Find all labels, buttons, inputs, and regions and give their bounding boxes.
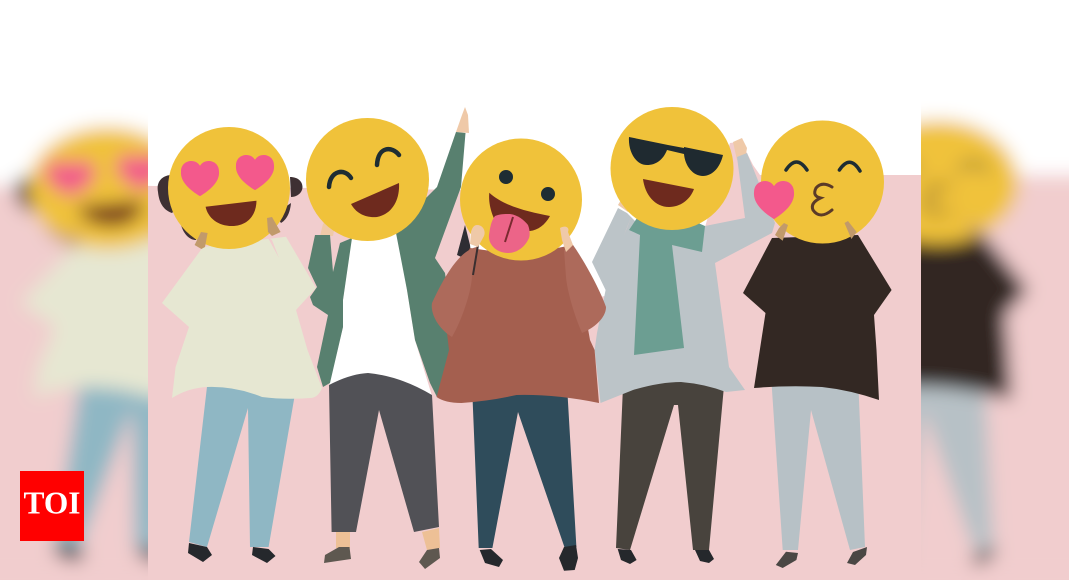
shoes: [776, 547, 867, 568]
kissing face: [761, 120, 884, 244]
teal scarf: [629, 215, 705, 355]
dark shirt: [743, 235, 892, 400]
person 1: heart eyes: [158, 127, 322, 563]
TOI logo: TOI: [24, 484, 80, 520]
white backdrop: [0, 109, 1069, 196]
ankles: [336, 528, 440, 550]
tongue: [489, 214, 530, 253]
raised hand: [456, 107, 469, 133]
light blue trousers: [189, 378, 296, 547]
hair: [158, 175, 302, 240]
grey jacket: [592, 153, 775, 403]
jacket gap: [625, 222, 630, 232]
shoes: [480, 545, 578, 571]
person 5: kissing: [743, 120, 892, 568]
pink background: [0, 142, 1069, 580]
waving hand: [320, 223, 334, 236]
laughing eyes: [329, 149, 399, 187]
mouth: [489, 193, 550, 231]
dark hair: [457, 225, 470, 257]
eyes: [499, 170, 555, 201]
white shirt: [329, 233, 432, 396]
person 3: tongue out: [432, 138, 606, 571]
navy trousers: [472, 385, 576, 548]
hands: [195, 217, 281, 249]
laughing face: [306, 118, 429, 241]
left sleeve: [432, 247, 477, 337]
tongue line: [505, 217, 513, 242]
right heart eye: [236, 155, 274, 190]
green jacket left side and arm: [308, 235, 352, 387]
TOI logo: [20, 471, 84, 541]
closed eyes: [786, 162, 860, 171]
shoes: [188, 543, 276, 563]
shirt crease: [268, 238, 278, 257]
tongue face: [460, 138, 582, 260]
shoes: [618, 549, 714, 564]
dress crease: [473, 245, 478, 275]
kissing lips: [812, 184, 832, 215]
sunglasses face: [610, 107, 734, 230]
raised hand: [733, 138, 747, 160]
green jacket right side and raised arm: [396, 132, 466, 397]
person 2: laughing: [306, 107, 469, 569]
cream shirt: [162, 237, 322, 399]
light grey trousers: [771, 375, 865, 550]
hands: [470, 225, 573, 252]
sunglasses: [629, 137, 723, 176]
person 4: sunglasses: [592, 107, 775, 564]
open mouth: [643, 179, 694, 207]
brown trousers: [616, 375, 725, 550]
smiling mouth: [206, 201, 256, 226]
main picture panel: [148, 107, 921, 580]
right sleeve: [564, 245, 606, 333]
hands: [775, 221, 857, 241]
brown dress: [437, 245, 599, 403]
blown heart: [754, 181, 794, 219]
heart eyes face: [168, 127, 290, 249]
shoes: [324, 547, 440, 569]
left heart eye: [181, 161, 219, 196]
grey trousers: [329, 373, 439, 532]
laughing mouth: [351, 183, 399, 217]
lower hand: [618, 202, 628, 212]
